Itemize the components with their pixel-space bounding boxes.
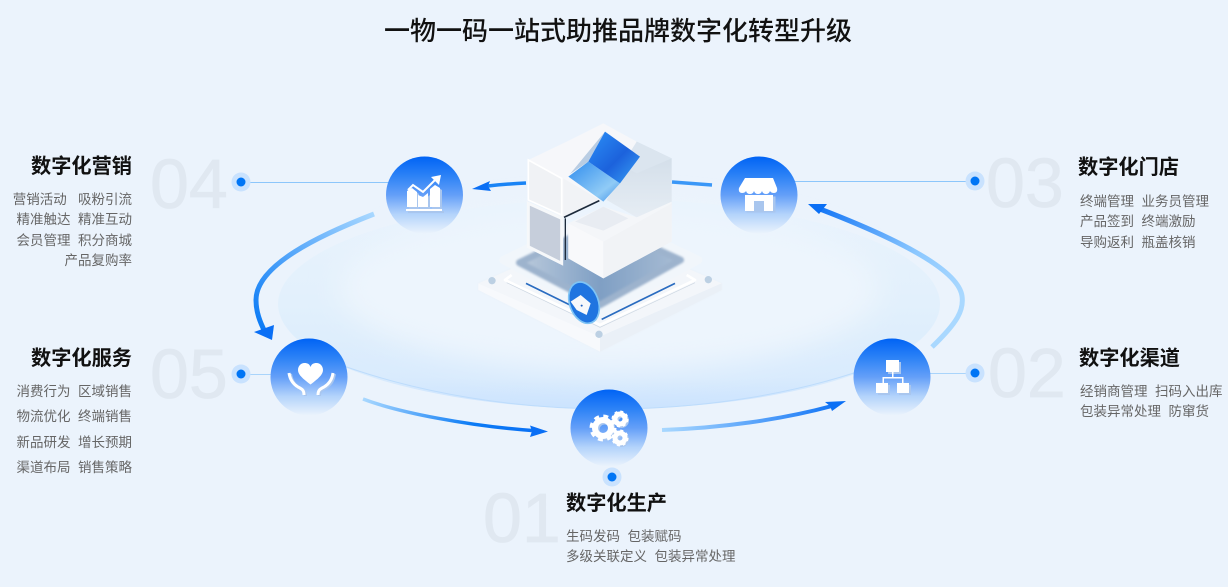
glass cube bottom left bbox=[528, 203, 565, 263]
white cube bottom right bbox=[568, 202, 672, 278]
panel: 03 digital store bbox=[986, 144, 1209, 250]
icon: gears bbox=[570, 390, 648, 466]
text block: 经销商管理 扫码入出库 包装异常处理 防窜货 bbox=[1080, 384, 1223, 419]
connector lines and dots bbox=[232, 172, 984, 486]
number 02: 02 bbox=[988, 334, 1066, 412]
panel: 05 digital service bbox=[16, 335, 228, 475]
QR tag disc bbox=[563, 278, 605, 328]
blue laptop bbox=[568, 132, 640, 202]
arrow: 03 to 04 behind cube bbox=[472, 181, 712, 191]
heading: 数字化渠道 bbox=[1079, 348, 1180, 370]
text block: 消费行为 区域销售 物流优化 终端销售 新品研发 增长预期 渠道布局 销售策略 bbox=[16, 384, 132, 475]
panel: 04 digital marketing bbox=[13, 145, 228, 268]
icon: storefront bbox=[720, 156, 798, 234]
icon: channel hierarchy bbox=[854, 338, 930, 416]
central isometric cube illustration bbox=[478, 123, 722, 352]
arrow: 04 to 05 bbox=[254, 214, 374, 340]
white cube top left bbox=[528, 123, 637, 217]
text block: 生码发码 包装赋码 多级关联定义 包装异常处理 bbox=[566, 529, 736, 564]
arrow: 02 to 03 bbox=[808, 204, 962, 347]
number 05: 05 bbox=[150, 335, 228, 413]
central orbit ellipse bbox=[278, 199, 940, 409]
base platform bbox=[478, 230, 722, 352]
panel: 01 digital production bbox=[483, 479, 736, 564]
number 04: 04 bbox=[150, 145, 228, 223]
glass tray bbox=[503, 213, 698, 319]
text block: 终端管理 业务员管理 产品签到 终端激励 导购返利 瓶盖核销 bbox=[1080, 194, 1209, 250]
icon: marketing chart bbox=[386, 156, 463, 234]
heading: 数字化营销 bbox=[31, 156, 132, 178]
heading: 数字化生产 bbox=[566, 493, 667, 515]
panel: 02 digital channel bbox=[988, 334, 1223, 419]
arrow: 01 to 02 bbox=[662, 401, 846, 430]
number 03: 03 bbox=[986, 144, 1064, 222]
number 01: 01 bbox=[483, 479, 561, 557]
heading: 数字化服务 bbox=[31, 348, 132, 370]
icon: heart in hands bbox=[270, 338, 348, 416]
glass cube top right bbox=[607, 142, 672, 217]
title: 一物一码一站式助推品牌数字化转型升级 bbox=[384, 16, 852, 46]
heading: 数字化门店 bbox=[1078, 157, 1179, 179]
text block: 营销活动 吸粉引流 精准触达 精准互动 会员管理 积分商城 产品复购率 bbox=[13, 192, 132, 268]
arrow: 05 to 01 bbox=[363, 399, 548, 437]
